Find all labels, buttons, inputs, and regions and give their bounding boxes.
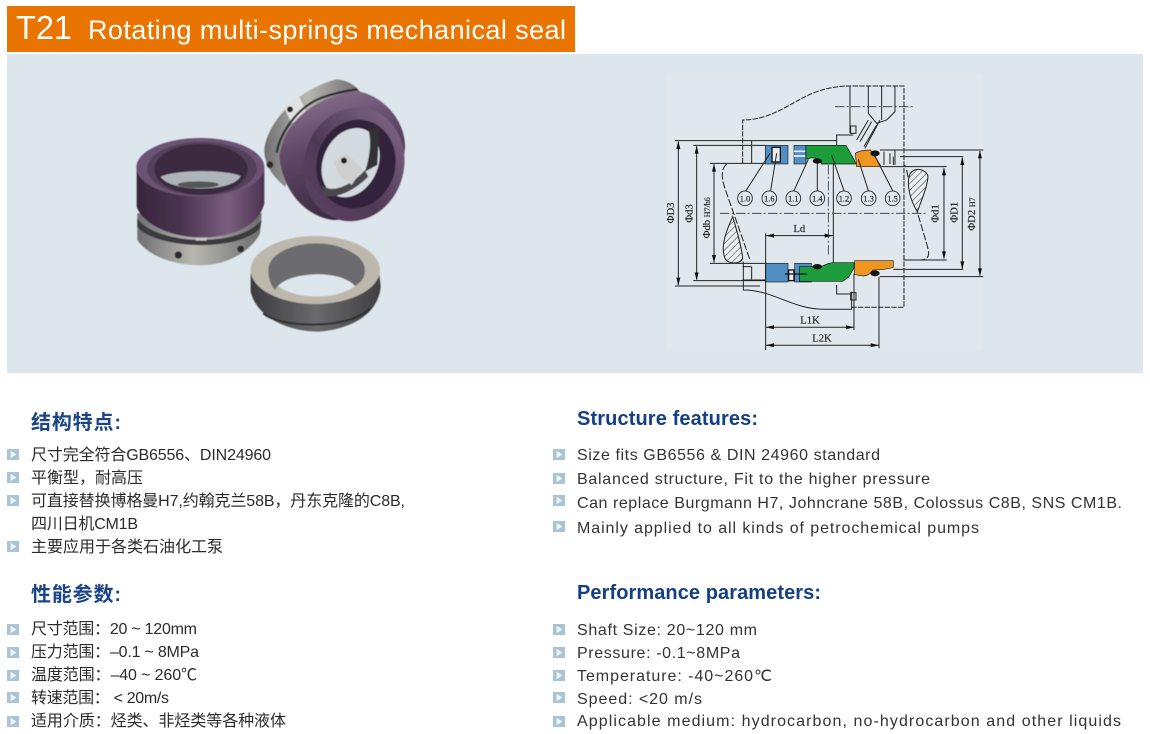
icon: stationary seat ring — [251, 236, 381, 332]
panel: Chinese structure features — [7, 411, 405, 556]
heading: structure features (Chinese): 结构特点: — [31, 411, 121, 434]
product photo: seal assemblies and seat ring — [136, 79, 417, 332]
list: structure features (Chinese): 平衡型，耐高压 — [31, 469, 143, 487]
part number callouts: 1.1 — [788, 194, 799, 203]
dimension labels — [666, 197, 978, 344]
list: structure features (Chinese): 可直接替换博格曼H7,约翰克兰58B，丹东克隆的C8B, — [31, 492, 405, 510]
dimension labels: L2K — [812, 333, 832, 344]
lower seal section — [765, 261, 893, 282]
list: structure features: Balanced structure, Fit to the higher pressure — [577, 471, 930, 488]
product title: Rotating multi-springs mechanical seal — [88, 15, 566, 45]
dimension labels: Φd3 — [685, 204, 696, 223]
heading: structure features: Structure features: — [577, 408, 758, 430]
title banner — [7, 6, 575, 52]
dimension labels: L1K — [800, 315, 820, 326]
part number callouts: 1.5 — [887, 194, 898, 203]
list: structure features (Chinese): 主要应用于各类石油化工泵 — [31, 537, 223, 556]
list: performance parameters: Speed: <20 m/s — [577, 691, 702, 708]
part number callouts: 1.6 — [764, 194, 775, 203]
list: structure features — [553, 447, 1122, 537]
heading: performance parameters: Performance parameters: — [577, 582, 821, 604]
part number callouts: 1.0 — [740, 194, 750, 203]
list: performance parameters (Chinese): 适用介质：烃类、非烃类等各种液体 — [31, 712, 286, 730]
dimension lines — [666, 141, 982, 350]
list: structure features: Can replace Burgmann H7, Johncrane 58B, Colossus C8B, SNS CM1B. — [577, 495, 1122, 512]
dimension labels: Φdb H7/h6 — [702, 197, 713, 238]
dimension labels: Ld — [793, 224, 806, 235]
panel: Chinese performance parameters — [7, 582, 286, 730]
panel: product image and drawing — [7, 54, 1143, 373]
shaft curves with hatching — [722, 164, 929, 263]
panel: English structure features — [553, 408, 1122, 537]
heading: performance parameters (Chinese): 性能参数: — [31, 582, 121, 606]
part number callouts: 1.3 — [863, 194, 874, 203]
list: performance parameters (Chinese): 温度范围：–40 ~ 260℃ — [31, 666, 197, 684]
dimension labels: Φd1 — [931, 204, 942, 223]
dimension labels: ΦD1 — [949, 202, 960, 223]
list: structure features: Size fits GB6556 & DIN 24960 standard — [577, 447, 880, 464]
panel: English performance parameters — [553, 582, 1121, 730]
list: performance parameters: Applicable medium: hydrocarbon, no-hydrocarbon and other liquids — [577, 713, 1121, 730]
list: performance parameters (Chinese): 尺寸范围：20 ~ 120mm — [31, 620, 197, 638]
list: performance parameters (Chinese) — [7, 620, 286, 730]
list: structure features: Mainly applied to all kinds of petrochemical pumps — [577, 520, 979, 537]
sectional drawing of the seal — [666, 73, 983, 350]
list: performance parameters: Pressure: -0.1~8MPa — [577, 645, 740, 662]
list: structure features (Chinese): 尺寸完全符合GB6556、DIN24960 — [31, 446, 271, 464]
list: performance parameters: Temperature: -40~260℃ — [577, 668, 772, 685]
list: performance parameters (Chinese): 转速范围： < 20m/s — [31, 689, 169, 707]
list: performance parameters — [553, 622, 1121, 730]
icon: front seal assembly — [136, 138, 264, 265]
list: structure features (Chinese): 四川日机CM1B — [31, 515, 138, 533]
dimension labels: ΦD2 H7 — [967, 197, 978, 231]
icon: rear seal assembly — [264, 79, 417, 233]
upper seal section — [765, 145, 893, 167]
list: performance parameters: Shaft Size: 20~120 mm — [577, 622, 757, 639]
list: structure features (Chinese) — [7, 446, 405, 556]
list: performance parameters (Chinese): 压力范围：–0.1 ~ 8MPa — [31, 643, 199, 661]
part number callouts — [738, 153, 900, 206]
model number: T21 — [16, 9, 72, 46]
part number callouts: 1.4 — [812, 194, 823, 203]
dimension labels: ΦD3 — [666, 202, 677, 223]
part number callouts: 1.2 — [839, 194, 849, 203]
housing outline — [710, 86, 983, 309]
